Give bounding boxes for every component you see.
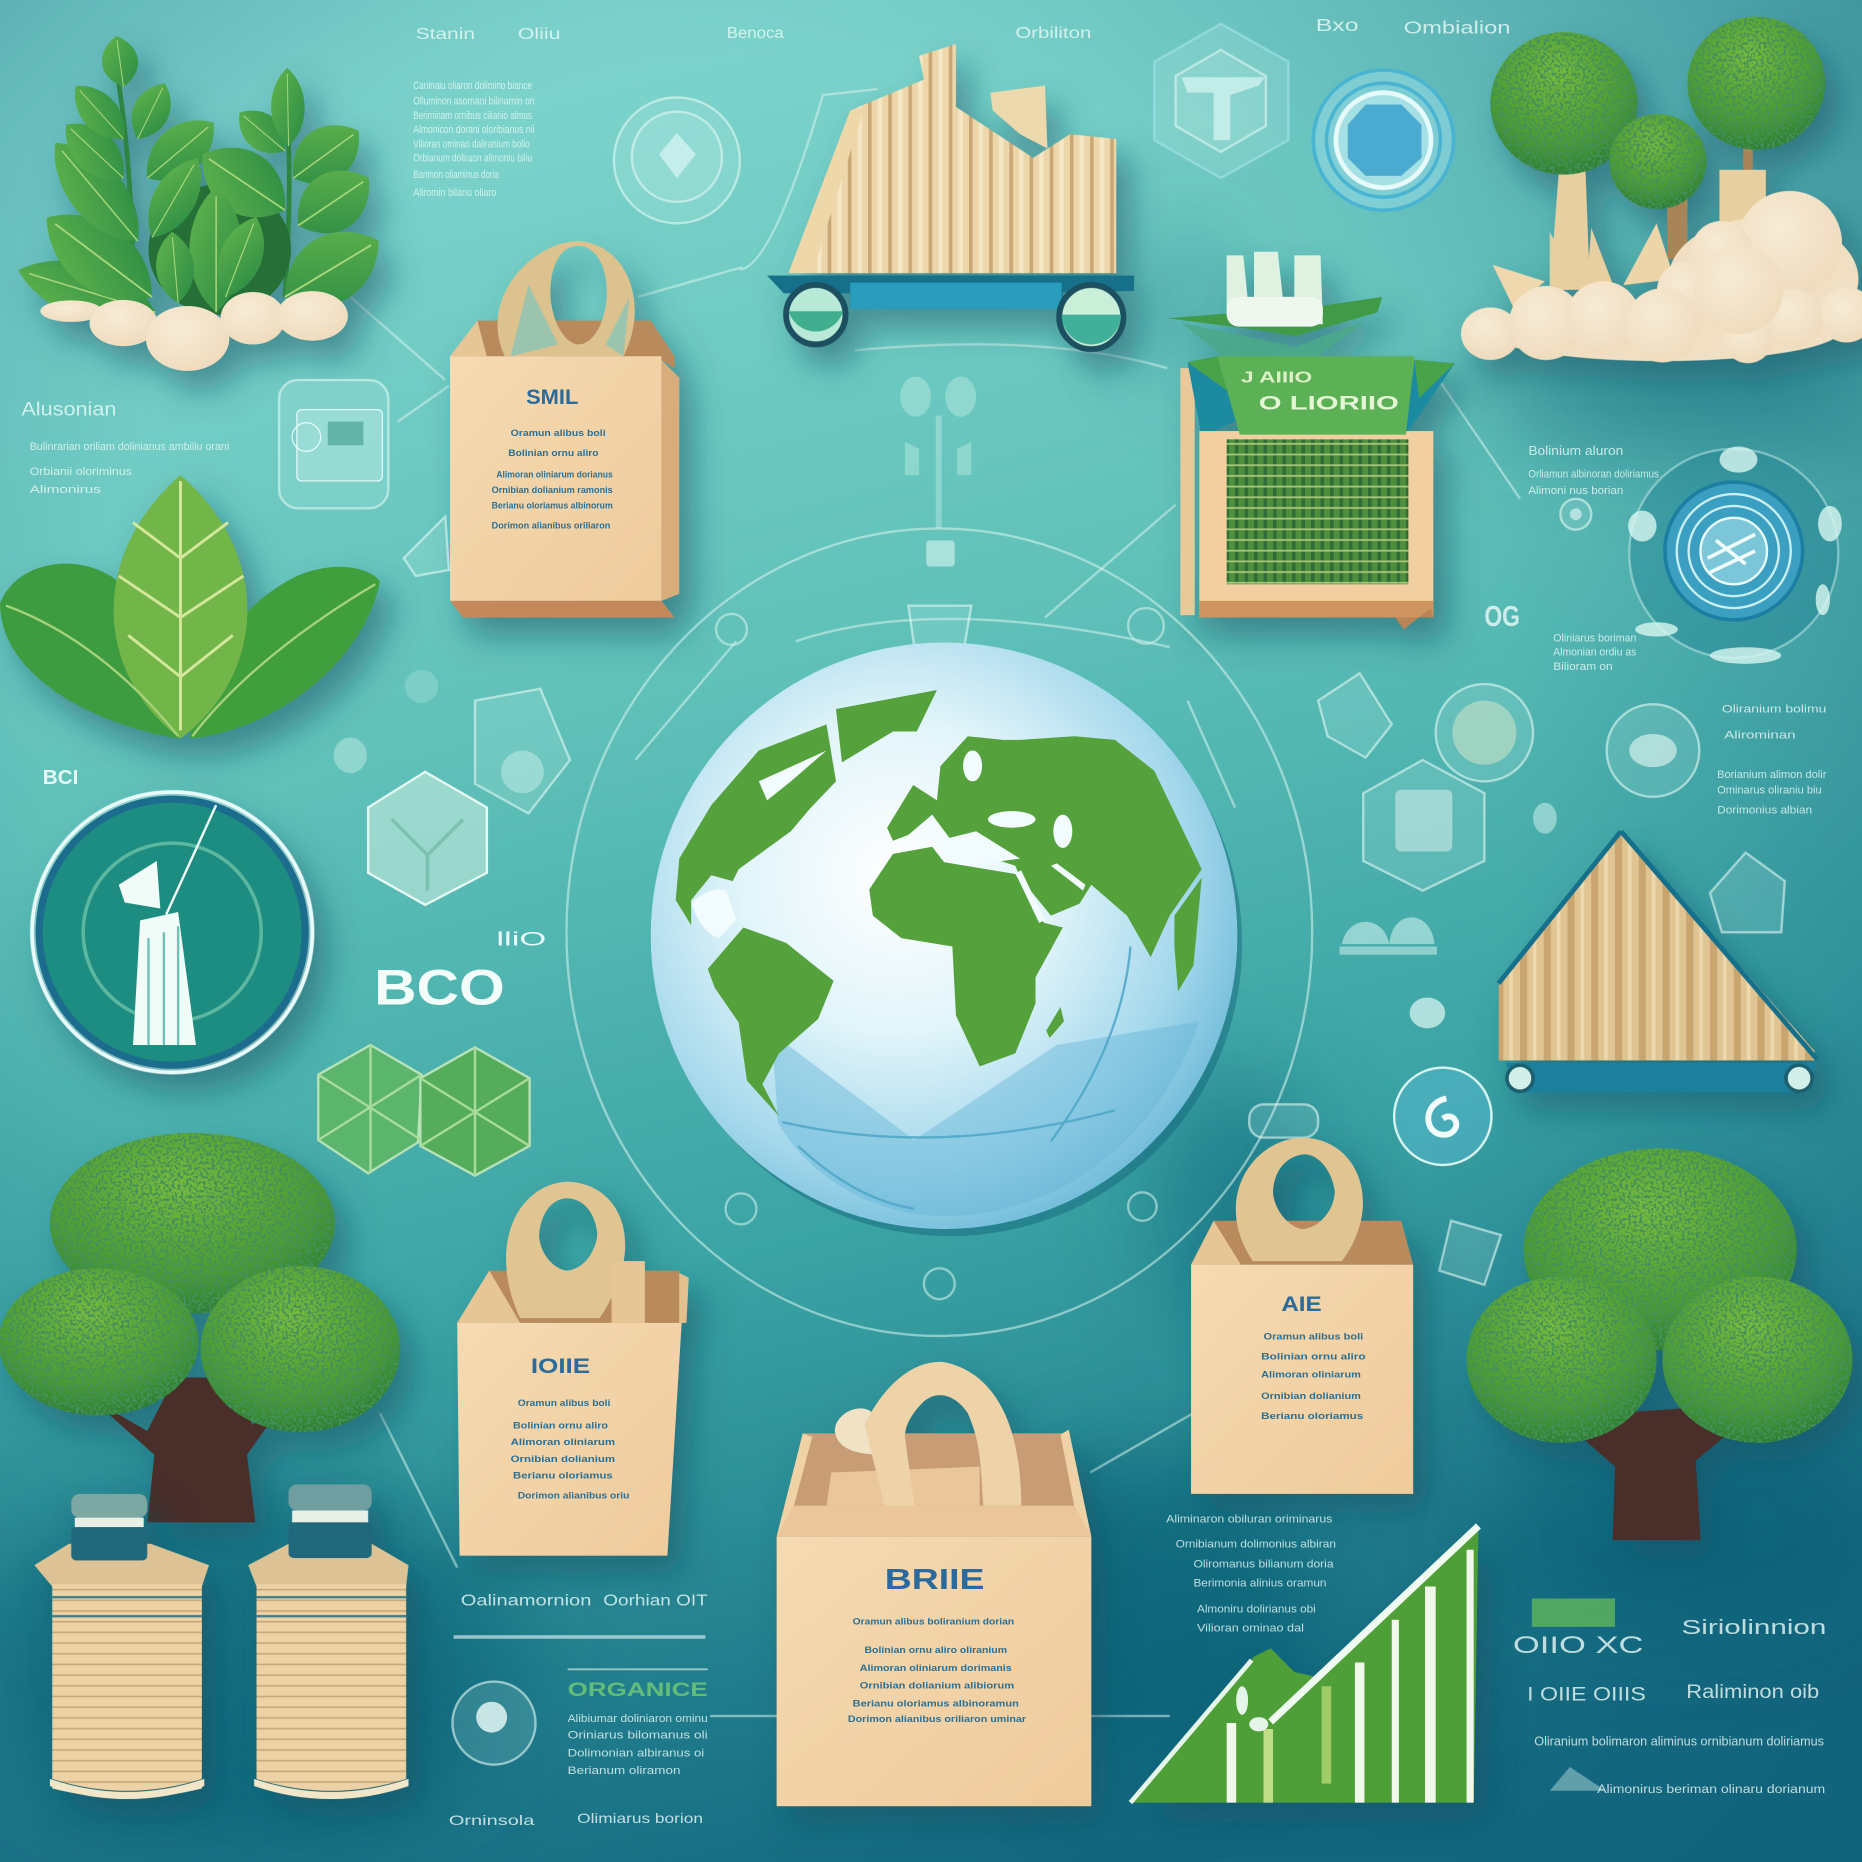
text block bottom centre left: Oalinamornion xyxy=(461,1592,591,1609)
text block top: Caninaiu oliaron dolimino biance xyxy=(413,80,532,92)
kraft box three: Alimoran oliniarum xyxy=(1261,1370,1361,1381)
text block bottom centre left: ORGANICE xyxy=(568,1680,708,1701)
trees on cloud top right xyxy=(1461,17,1862,363)
text panel bottom right: Siriolinnion xyxy=(1682,1617,1826,1639)
small label left: BCI xyxy=(43,767,78,789)
coil jar right xyxy=(248,1484,408,1799)
text panel bottom right: I OIIE OIIIS xyxy=(1527,1685,1646,1706)
right text lines xyxy=(1717,704,1827,816)
kraft box one: Ornibian dolianium ramonis xyxy=(492,485,613,496)
text panel bottom right: Oliranium bolimaron aliminus ornibianum doliriamus xyxy=(1534,1734,1824,1749)
large kraft box: Oramun alibus boliranium dorian xyxy=(853,1617,1014,1628)
text block top: Orbianum doliraon alimoniu biliu xyxy=(413,152,532,164)
large kraft box xyxy=(777,1362,1091,1806)
left text block: Alusonian xyxy=(21,400,116,421)
text block bottom centre left: Berianum oliramon xyxy=(568,1765,681,1777)
text block bottom centre left: Olimiarus borion xyxy=(577,1811,703,1827)
text block top: Aliromin bilanu oliaro xyxy=(413,187,496,199)
header labels: Orbiliton xyxy=(1015,25,1091,42)
text block top: Barimon oliaminus doria xyxy=(413,169,499,181)
text block bottom centre left xyxy=(449,1592,708,1829)
kraft box three xyxy=(1191,1138,1413,1494)
header labels: Stanin xyxy=(416,26,475,43)
glass hexagon top right xyxy=(1154,24,1288,178)
text panel bottom right: Alimonirus beriman olinaru dorianum xyxy=(1597,1782,1825,1796)
sea facets xyxy=(772,946,1199,1216)
right text lines: Borianium alimon dolir xyxy=(1717,769,1827,781)
text block above chart: Oliromanus bilianum doria xyxy=(1193,1558,1334,1570)
text block bottom centre left: Alibiumar doliniaron ominu xyxy=(568,1713,708,1725)
small circle icon right xyxy=(1560,499,1591,530)
glass icon top xyxy=(614,97,740,223)
right glass icons cluster xyxy=(1318,673,1699,891)
text block above chart: Almoniru dolirianus obi xyxy=(1197,1604,1316,1616)
kraft box one: Oramun alibus boli xyxy=(511,428,606,439)
kraft box two: Alimoran oliniarum xyxy=(511,1437,615,1448)
kraft box two: Bolinian ornu aliro xyxy=(513,1421,608,1432)
glass card icon xyxy=(279,380,388,508)
large kraft box: BRIIE xyxy=(885,1564,984,1596)
wooden cart top centre xyxy=(767,44,1134,349)
text block top: Olluminon asornani bilinarnin on xyxy=(413,95,534,107)
large kraft box: Ornibian dolianium alibiorum xyxy=(860,1681,1014,1692)
blue round icon top right xyxy=(1313,70,1454,210)
header labels: Bxo xyxy=(1316,15,1359,35)
kraft box one xyxy=(450,241,679,618)
right text lines: Ominarus oliraniu biu xyxy=(1717,784,1822,796)
growth chart xyxy=(1130,1526,1478,1803)
kraft box one: Berianu oloriamus albinorum xyxy=(492,500,613,511)
blue fingerprint icon right xyxy=(1628,446,1842,664)
tree bottom right xyxy=(1467,1148,1852,1540)
text block bottom centre left: Oriniarus bilomanus oli xyxy=(568,1729,708,1741)
kraft box two: Oramun alibus boli xyxy=(518,1398,610,1409)
text block above chart: Vilioran ominao dal xyxy=(1197,1623,1304,1635)
kraft box three: Oramun alibus boli xyxy=(1264,1332,1363,1343)
kraft box three: Ornibian dolianium xyxy=(1261,1391,1361,1402)
text block above chart: Berimonia alinius oramun xyxy=(1193,1577,1326,1589)
left text block: Orbianii oloriminus xyxy=(30,466,132,478)
text block bottom centre left: Dolimonian albiranus oi xyxy=(568,1747,704,1759)
large kraft box: Dorimon alianibus oriliaron uminar xyxy=(848,1714,1026,1725)
green crate with banner xyxy=(1167,252,1455,629)
glass shapes lower right of globe xyxy=(1249,1104,1501,1285)
header labels: Benoca xyxy=(727,25,784,42)
right text block: Bolinium aluron xyxy=(1528,443,1623,458)
coil jar left xyxy=(34,1494,209,1799)
polar ice and lakes xyxy=(691,750,1085,938)
green crate with banner: O LIORIIO xyxy=(1259,394,1399,415)
text block top: Vilioran ominao daliranium bolio xyxy=(413,138,530,150)
text block top: Beriminam ornibus cilianio almus xyxy=(413,110,532,122)
right text block: Alimoni nus borian xyxy=(1528,485,1623,497)
glass shapes near house xyxy=(1340,853,1785,1028)
header labels: Ombialion xyxy=(1404,17,1510,37)
continents xyxy=(676,690,1202,1116)
text block top xyxy=(413,80,534,199)
plant with leaves top left xyxy=(10,34,396,371)
text block above chart: Aliminaron obiluran oriminarus xyxy=(1166,1513,1332,1525)
left text block: Alimonirus xyxy=(30,484,101,496)
green crate with banner: J AIIIO xyxy=(1241,369,1312,386)
small icon above globe xyxy=(900,376,976,566)
spiral icon xyxy=(1394,1068,1492,1165)
text panel bottom right xyxy=(1513,1598,1826,1796)
kraft box one: SMIL xyxy=(526,385,578,409)
round tower badge xyxy=(30,790,315,1075)
kraft box one: Alimoran oliniarum dorianus xyxy=(496,469,613,480)
kraft box two xyxy=(457,1182,689,1556)
kraft box two: IOIIE xyxy=(531,1354,590,1378)
label and lines right middle: Bilioram on xyxy=(1553,661,1613,673)
text block above chart: Ornibianum dolimonius albiran xyxy=(1176,1538,1336,1550)
kraft box three: AIE xyxy=(1281,1292,1322,1316)
text panel bottom right: OIIO XC xyxy=(1513,1632,1644,1659)
header labels xyxy=(416,15,1510,43)
kraft box one: Dorimon alianibus oriliaron xyxy=(492,520,611,531)
orbit ring with nodes xyxy=(566,528,1312,1336)
kraft box one: Bolinian ornu aliro xyxy=(508,448,599,459)
tree bottom left xyxy=(0,1133,400,1522)
left text block: Bulinrarian oriliam dolinianus ambiliu orani xyxy=(30,441,229,453)
globe xyxy=(651,642,1242,1236)
left text block xyxy=(21,400,229,496)
label and lines right middle: OG xyxy=(1484,601,1520,633)
right text block: Orliamun albinoran doliriamus xyxy=(1528,468,1659,480)
large kraft box: Berianu oloriamus albinoramun xyxy=(853,1698,1019,1709)
text block bottom centre left: Orninsola xyxy=(449,1813,534,1829)
large label: BCO xyxy=(374,960,505,1016)
right text lines: Dorimonius albian xyxy=(1717,804,1812,816)
left glass icons xyxy=(334,517,570,905)
large label: lliO xyxy=(496,929,546,950)
large label xyxy=(374,929,546,1016)
kraft box three: Bolinian ornu aliro xyxy=(1261,1352,1366,1363)
large kraft box: Bolinian ornu aliro oliranium xyxy=(864,1645,1007,1656)
text block bottom centre left: Oorhian OIT xyxy=(603,1592,708,1609)
small glass circle bottom xyxy=(452,1682,536,1765)
label and lines right middle xyxy=(1484,601,1636,673)
text block above chart xyxy=(1166,1513,1336,1635)
text panel bottom right: Raliminon oib xyxy=(1686,1682,1819,1703)
text block top: Almonicon dorani oloribianus nii xyxy=(413,124,534,136)
kraft box three: Berianu oloriamus xyxy=(1261,1411,1363,1422)
connector lines xyxy=(350,89,1520,1716)
kraft box two: Berianu oloriamus xyxy=(513,1470,613,1481)
right text lines: Oliranium bolimu xyxy=(1722,704,1826,716)
header labels: Oliiu xyxy=(518,26,560,43)
leaf trio xyxy=(0,475,380,739)
right text lines: Alirominan xyxy=(1724,730,1796,742)
large kraft box: Alimoran oliniarum dorimanis xyxy=(860,1663,1012,1674)
wooden house on cart xyxy=(1499,831,1817,1092)
label and lines right middle: Oliniarus boriman xyxy=(1553,632,1636,644)
kraft box two: Ornibian dolianium xyxy=(511,1454,615,1465)
kraft box two: Dorimon alianibus oriu xyxy=(518,1491,630,1502)
green leaf hexagons xyxy=(318,1045,530,1176)
label and lines right middle: Almonian ordiu as xyxy=(1553,647,1636,659)
right text block xyxy=(1528,443,1659,497)
